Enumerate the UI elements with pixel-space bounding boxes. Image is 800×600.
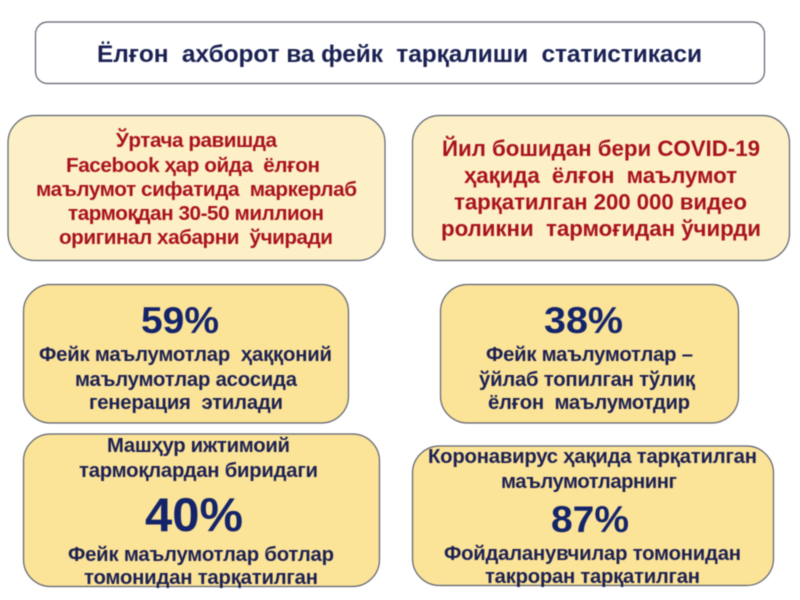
panel text: Facebook removals: [36, 128, 357, 249]
panel text: Facebook removals: маълумот сифатида маркерлаб: [36, 178, 357, 201]
panel text: 87 percent detail: [444, 543, 741, 588]
panel text: 38 percent: ўйлаб топилган тўлиқ: [479, 369, 696, 391]
panel text: 40 percent detail: [68, 544, 334, 589]
panel text: 40 percent detail: Фейк маълумотлар ботлар: [68, 544, 334, 566]
panel text: COVID-19 video removals: ҳақида ёлғон маълумот: [464, 163, 737, 188]
panel text: 38 percent: [479, 344, 696, 414]
panel text: 40 percent intro: [79, 435, 318, 482]
panel text: 87 percent detail: такроран тарқатилган: [485, 566, 700, 588]
panel text: COVID-19 video removals: Йил бошидан бери COVID-19: [442, 136, 760, 161]
panel text: COVID-19 video removals: [441, 136, 761, 241]
panel: 59 percent: [24, 284, 348, 423]
panel text: 38 percent: ёлғон маълумотдир: [488, 392, 690, 414]
panel text: 59 percent: генерация этилади: [89, 392, 283, 414]
panel text: COVID-19 video removals: тарқатилган 200 000 видео: [454, 190, 747, 214]
panel: Facebook removals: [8, 116, 385, 260]
statistic: 40%: 40%: [145, 488, 243, 541]
panel text: Facebook removals: Facebook ҳар ойда ёлғон: [66, 154, 320, 177]
panel: 87 percent: [412, 446, 774, 588]
statistic: 87%: 87%: [551, 499, 629, 540]
panel text: 38 percent: Фейк маълумотлар –: [486, 344, 693, 366]
panel text: 87 percent intro: [428, 446, 757, 493]
panel text: 59 percent: маълумотлар асосида: [75, 369, 298, 391]
panel: 40 percent: [24, 434, 380, 589]
panel: COVID-19 video removals: [412, 116, 790, 260]
panel: 38 percent: [440, 284, 738, 423]
statistic: 59%: 59%: [141, 300, 219, 341]
panel text: Facebook removals: оригинал хабарни ўчиради: [59, 226, 333, 249]
panel text: 87 percent detail: Фойдаланувчилар томонидан: [444, 543, 741, 565]
panel text: Facebook removals: Ўртача равишда: [115, 128, 277, 152]
statistic: 38%: 38%: [544, 300, 623, 341]
panel text: COVID-19 video removals: роликни тармоғидан ўчирди: [441, 216, 761, 241]
panel text: 87 percent intro: маълумотларнинг: [501, 471, 677, 493]
panel text: 59 percent: [39, 344, 332, 414]
panel text: Facebook removals: тармоқдан 30-50 миллион: [68, 202, 324, 225]
title box: [36, 22, 764, 84]
panel text: 87 percent intro: Коронавирус ҳақида тарқатилган: [428, 446, 757, 468]
panel text: 40 percent intro: Машҳур ижтимоий: [107, 435, 290, 457]
title: Ёлғон ахборот ва фейк тарқалиши статистикаси: [97, 41, 702, 68]
panel text: 40 percent intro: тармоқлардан биридаги: [79, 460, 318, 482]
panel text: 59 percent: Фейк маълумотлар ҳаққоний: [39, 344, 332, 366]
panel text: 40 percent detail: томонидан тарқатилган: [84, 567, 318, 589]
